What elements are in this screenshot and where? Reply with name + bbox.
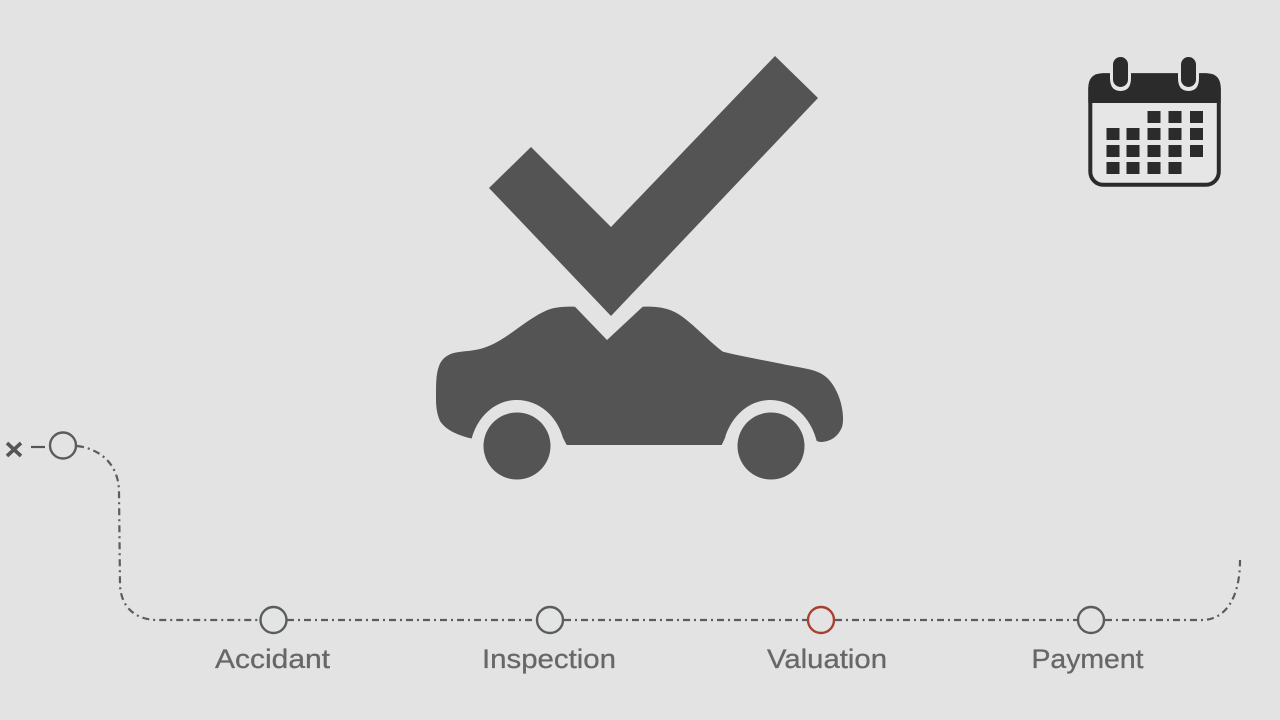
step: Accidant <box>215 607 331 674</box>
calendar rings <box>1110 57 1199 91</box>
front wheel <box>738 412 804 480</box>
icon: car silhouette <box>436 307 843 480</box>
calendar header <box>1088 73 1221 103</box>
step: Payment: Payment <box>1032 644 1144 674</box>
start connector <box>31 446 45 448</box>
icon: calendar <box>1088 57 1221 185</box>
calendar date grid <box>1106 111 1203 174</box>
calendar body <box>1090 75 1219 185</box>
step: Payment <box>1032 607 1144 674</box>
icon: large check mark <box>489 56 818 316</box>
step: Accidant: Accidant <box>215 644 331 674</box>
timeline: dashed route <box>77 446 1240 620</box>
step: Inspection: Inspection <box>482 644 616 674</box>
step: Valuation: Valuation <box>767 644 887 674</box>
step: Inspection <box>482 607 616 674</box>
icon: start x marker <box>7 443 45 456</box>
start node <box>50 432 76 458</box>
step: Valuation <box>767 607 887 674</box>
rear wheel <box>484 412 550 480</box>
